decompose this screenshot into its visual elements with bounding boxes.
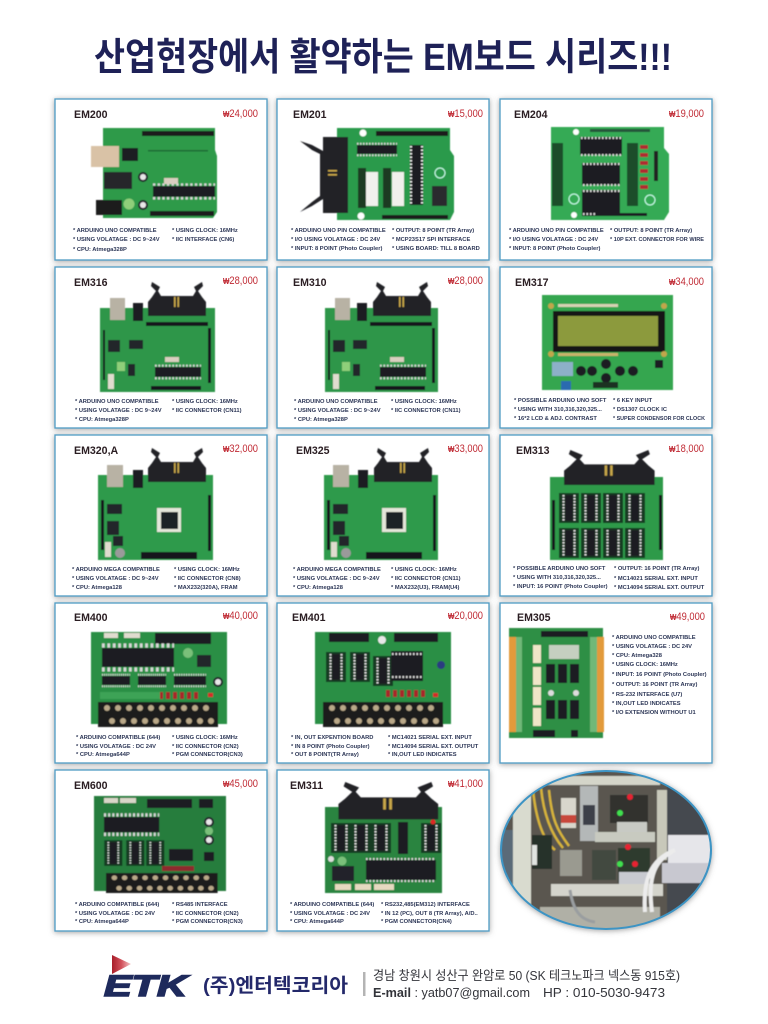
- panel: EM200: [55, 99, 267, 260]
- board image: EM317: [542, 295, 673, 390]
- specs: EM310: [294, 399, 461, 423]
- price: EM204: ₩19,000: [669, 108, 704, 120]
- specs: EM305: * OUTPUT: 16 POINT (TR Array): [612, 682, 697, 688]
- specs: EM305: * RS-232 INTERFACE (U7): [612, 692, 682, 698]
- specs: EM201: [291, 228, 480, 252]
- specs: EM400: * IIC CONNECTOR (CN2): [172, 744, 239, 750]
- price: EM401: ₩20,000: [448, 610, 483, 622]
- specs: EM400: * PGM CONNECTOR(CN3): [172, 752, 243, 758]
- heading: EM320,A: EM320,A: [74, 445, 119, 457]
- heading: EM313: EM313: [516, 445, 550, 457]
- company name: (주)엔터텍코리아: [203, 975, 348, 997]
- heading: EM200: EM200: [74, 109, 108, 121]
- panel: EM320,A: [55, 435, 267, 596]
- specs: EM316: * IIC CONNECTOR (CN11): [172, 408, 242, 414]
- specs: EM317: * POSSIBLE ARDUINO UNO SOFT: [514, 398, 607, 404]
- specs: EM317: * DS1307 CLOCK IC: [613, 407, 667, 413]
- specs: EM311: * CPU: Atmega644P: [290, 919, 344, 925]
- specs: EM600: * IIC CONNECTOR (CN2): [172, 911, 239, 917]
- specs: EM305: * I/O EXTENSION WITHOUT U1: [612, 710, 697, 716]
- specs: EM401: * MC14021 SERIAL EXT. INPUT: [388, 735, 472, 741]
- specs: EM313: [513, 566, 705, 591]
- panel: EM204: [500, 99, 712, 260]
- specs: EM600: * USING VOLATAGE : DC 24V: [75, 911, 155, 917]
- specs: EM311: * RS232,485(EM312) INTERFACE: [381, 902, 470, 908]
- specs: EM316: * ARDUINO UNO COMPATIBLE: [75, 399, 159, 405]
- specs: EM310: * CPU: Atmega328P: [294, 417, 348, 423]
- logo text: ETK: ETK: [104, 970, 190, 1003]
- specs: EM317: * USING WITH 310,316,320,325...: [514, 407, 602, 413]
- price: EM305: ₩49,000: [670, 611, 705, 623]
- specs: EM320,A: * USING VOLATAGE : DC 9~24V: [72, 576, 159, 582]
- specs: EM310: * IIC CONNECTOR (CN11): [391, 408, 461, 414]
- specs: EM401: * IN,OUT LED INDICATES: [388, 752, 457, 758]
- board image: EM200: [91, 128, 217, 218]
- specs: EM201: * USING BOARD: TILL 8 BOARD: [392, 246, 480, 252]
- specs: EM325: * CPU: Atmega128: [293, 585, 344, 591]
- price: EM311: ₩41,000: [448, 778, 483, 790]
- heading: EM400: EM400: [74, 612, 108, 624]
- specs: EM600: [75, 902, 243, 925]
- specs: EM325: * USING VOLATAGE : DC 9~24V: [293, 576, 380, 582]
- board image: EM401: [315, 632, 451, 727]
- specs: EM401: * OUT 8 POINT(TR Array): [291, 752, 359, 758]
- specs: EM204: * ARDUINO UNO PIN COMPATIBLE: [509, 228, 604, 234]
- address: 경남 창원시 성산구 완암로 50 (SK 테크노파크 넥스동 915호): [373, 968, 680, 983]
- panel: EM311: [277, 770, 489, 931]
- panel: EM401: [277, 603, 489, 763]
- specs: EM201: * ARDUINO UNO PIN COMPATIBLE: [291, 228, 386, 234]
- specs: EM204: * 10P EXT. CONNECTOR FOR WIRE: [610, 237, 704, 243]
- icon: red triangle: [112, 955, 131, 974]
- board image: EM204: [551, 127, 669, 220]
- specs: EM310: * ARDUINO UNO COMPATIBLE: [294, 399, 378, 405]
- specs: EM401: * MC14094 SERIAL EXT. OUTPUT: [388, 744, 479, 750]
- specs: EM201: * OUTPUT: 8 POINT (TR Array): [392, 228, 474, 234]
- price: EM316: ₩28,000: [223, 275, 258, 287]
- price: EM313: ₩18,000: [669, 443, 704, 455]
- specs: EM600: * RS485 INTERFACE: [172, 902, 228, 908]
- specs: EM201: * MCP23S17 SPI INTERFACE: [392, 237, 470, 243]
- footer: contact details: [363, 968, 680, 1000]
- specs: EM204: [509, 228, 704, 252]
- specs: EM305: * INPUT: 16 POINT (Photo Coupler): [612, 672, 707, 678]
- specs: EM311: [290, 902, 478, 925]
- board image: EM313: [550, 450, 663, 560]
- specs: EM320,A: * USING CLOCK: 16MHz: [174, 567, 240, 573]
- specs: EM317: * 16*2 LCD & ADJ. CONTRAST: [514, 416, 597, 422]
- board image: EM316: [100, 282, 215, 392]
- price: EM310: ₩28,000: [448, 275, 483, 287]
- specs: EM305: * USING CLOCK: 16MHz: [612, 662, 678, 668]
- specs: EM400: * CPU: Atmega644P: [76, 752, 130, 758]
- heading: EM201: EM201: [293, 109, 327, 121]
- heading: EM317: EM317: [515, 277, 549, 289]
- price: EM201: ₩15,000: [448, 108, 483, 120]
- specs: EM600: * CPU: Atmega644P: [75, 919, 129, 925]
- specs: EM310: * USING VOLATAGE : DC 9~24V: [294, 408, 381, 414]
- photo: control panel in circular frame: [500, 770, 714, 930]
- specs: EM201: * I/O USING VOLATAGE : DC 24V: [291, 237, 380, 243]
- specs: EM320,A: * ARDUINO MEGA COMPATIBLE: [72, 567, 160, 573]
- specs: EM204: * OUTPUT: 8 POINT (TR Array): [610, 228, 692, 234]
- specs: EM316: * USING VOLATAGE : DC 9~24V: [75, 408, 162, 414]
- specs: EM400: * USING VOLATAGE : DC 24V: [76, 744, 156, 750]
- specs: EM204: * I/O USING VOLATAGE : DC 24V: [509, 237, 598, 243]
- specs: EM325: * USING CLOCK: 16MHz: [391, 567, 457, 573]
- board image: EM320,A: [98, 448, 213, 560]
- specs: EM313: * OUTPUT: 16 POINT (TR Array): [614, 566, 699, 572]
- phone: HP : 010-5030-9473: [543, 985, 665, 1000]
- specs: EM311: * USING VOLATAGE : DC 24V: [290, 911, 370, 917]
- panel: EM600: [55, 770, 267, 931]
- specs: EM311: * ARDUINO COMPATIBLE (644): [290, 902, 374, 908]
- specs: EM401: * IN, OUT EXPENTION BOARD: [291, 735, 373, 741]
- panel: EM316: [55, 267, 267, 428]
- specs: EM310: * USING CLOCK: 16MHz: [391, 399, 457, 405]
- specs: EM305: * CPU: Atmega328: [612, 653, 663, 659]
- specs: EM400: * USING CLOCK: 16MHz: [172, 735, 238, 741]
- email: E-mail : yatb07@gmail.com: [373, 985, 530, 1000]
- board image: EM305: [509, 628, 604, 738]
- specs: EM400: * ARDUINO COMPATIBLE (644): [76, 735, 160, 741]
- heading: EM401: EM401: [292, 612, 326, 624]
- specs: EM316: [75, 399, 242, 423]
- specs: EM204: * INPUT: 8 POINT (Photo Coupler): [509, 246, 600, 252]
- specs: EM313: * INPUT: 16 POINT (Photo Coupler): [513, 584, 608, 590]
- specs: EM200: * IIC INTERFACE (CN6): [172, 237, 234, 243]
- specs: EM325: [293, 567, 461, 591]
- specs: EM311: * PGM CONNECTOR(CN4): [381, 919, 452, 925]
- specs: EM320,A: * MAX232(320A), FRAM: [174, 585, 238, 591]
- board image: EM400: [91, 632, 227, 727]
- specs: EM313: * POSSIBLE ARDUINO UNO SOFT: [513, 566, 606, 572]
- board image: EM600: [94, 796, 226, 893]
- price: EM325: ₩33,000: [448, 443, 483, 455]
- specs: EM200: * ARDUINO UNO COMPATIBLE: [73, 228, 157, 234]
- specs: EM311: * IN 12 (PC), OUT 8 (TR Array), A/D..: [381, 911, 478, 917]
- specs: EM200: * USING VOLATAGE : DC 9~24V: [73, 237, 160, 243]
- specs: EM317: * SUPER CONDENSOR FOR CLOCK: [613, 416, 706, 422]
- price: EM317: ₩34,000: [669, 276, 704, 288]
- heading: EM305: EM305: [517, 612, 551, 624]
- specs: EM325: * IIC CONNECTOR (CN11): [391, 576, 461, 582]
- panel: EM325: [277, 435, 489, 596]
- specs: EM200: [73, 228, 238, 253]
- specs: EM316: * CPU: Atmega328P: [75, 417, 129, 423]
- specs: EM320,A: * CPU: Atmega128: [72, 585, 123, 591]
- specs: EM317: * 6 KEY INPUT: [613, 398, 653, 404]
- specs: EM320,A: * IIC CONNECTOR (CN8): [174, 576, 241, 582]
- heading: EM325: EM325: [296, 445, 330, 457]
- board image: EM310: [325, 282, 438, 392]
- specs: EM600: * PGM CONNECTOR(CN3): [172, 919, 243, 925]
- specs: EM400: [76, 735, 243, 758]
- specs: EM317: [514, 398, 706, 422]
- specs: EM305: * USING VOLATAGE : DC 24V: [612, 644, 692, 650]
- specs: EM316: * USING CLOCK: 16MHz: [172, 399, 238, 405]
- board image: EM311: [325, 782, 442, 893]
- specs: EM313: * MC14021 SERIAL EXT. INPUT: [614, 576, 698, 582]
- panel: EM313: [500, 435, 712, 596]
- panel: EM310: [277, 267, 489, 428]
- specs: EM305: * IN,OUT LED INDICATES: [612, 701, 681, 707]
- specs: EM320,A: [72, 567, 241, 591]
- board image: EM325: [324, 448, 438, 560]
- title: 산업현장에서 활약하는 EM보드 시리즈!!!: [94, 37, 672, 79]
- specs: EM200: * CPU: Atmega328P: [73, 247, 127, 253]
- heading: EM316: EM316: [74, 277, 108, 289]
- specs: EM401: [291, 735, 479, 758]
- specs: EM313: * USING WITH 310,316,320,325...: [513, 575, 601, 581]
- specs: EM200: * USING CLOCK: 16MHz: [172, 228, 238, 234]
- specs: EM325: * ARDUINO MEGA COMPATIBLE: [293, 567, 381, 573]
- specs: EM401: * IN 8 POINT (Photo Coupler): [291, 744, 370, 750]
- specs: EM305: [612, 635, 707, 716]
- specs: EM305: * ARDUINO UNO COMPATIBLE: [612, 635, 696, 641]
- specs: EM313: * MC14094 SERIAL EXT. OUTPUT: [614, 585, 705, 591]
- price: EM600: ₩45,000: [223, 778, 258, 790]
- specs: EM325: * MAX232(U3), FRAM(U4): [391, 585, 459, 591]
- heading: EM310: EM310: [293, 277, 327, 289]
- price: EM400: ₩40,000: [223, 610, 258, 622]
- footer: company logo: [104, 955, 190, 1003]
- specs: EM600: * ARDUINO COMPATIBLE (644): [75, 902, 159, 908]
- panel: EM305: [500, 603, 712, 763]
- panel: EM317: [500, 267, 712, 428]
- heading: EM204: EM204: [514, 109, 548, 121]
- specs: EM201: * INPUT: 8 POINT (Photo Coupler): [291, 246, 382, 252]
- panel: EM201: [277, 99, 489, 260]
- price: EM320,A: ₩32,000: [223, 443, 258, 455]
- heading: EM311: EM311: [290, 780, 323, 792]
- panel: EM400: [55, 603, 267, 763]
- price: EM200: ₩24,000: [223, 108, 258, 120]
- board image: EM201: [300, 128, 454, 220]
- heading: EM600: EM600: [74, 780, 108, 792]
